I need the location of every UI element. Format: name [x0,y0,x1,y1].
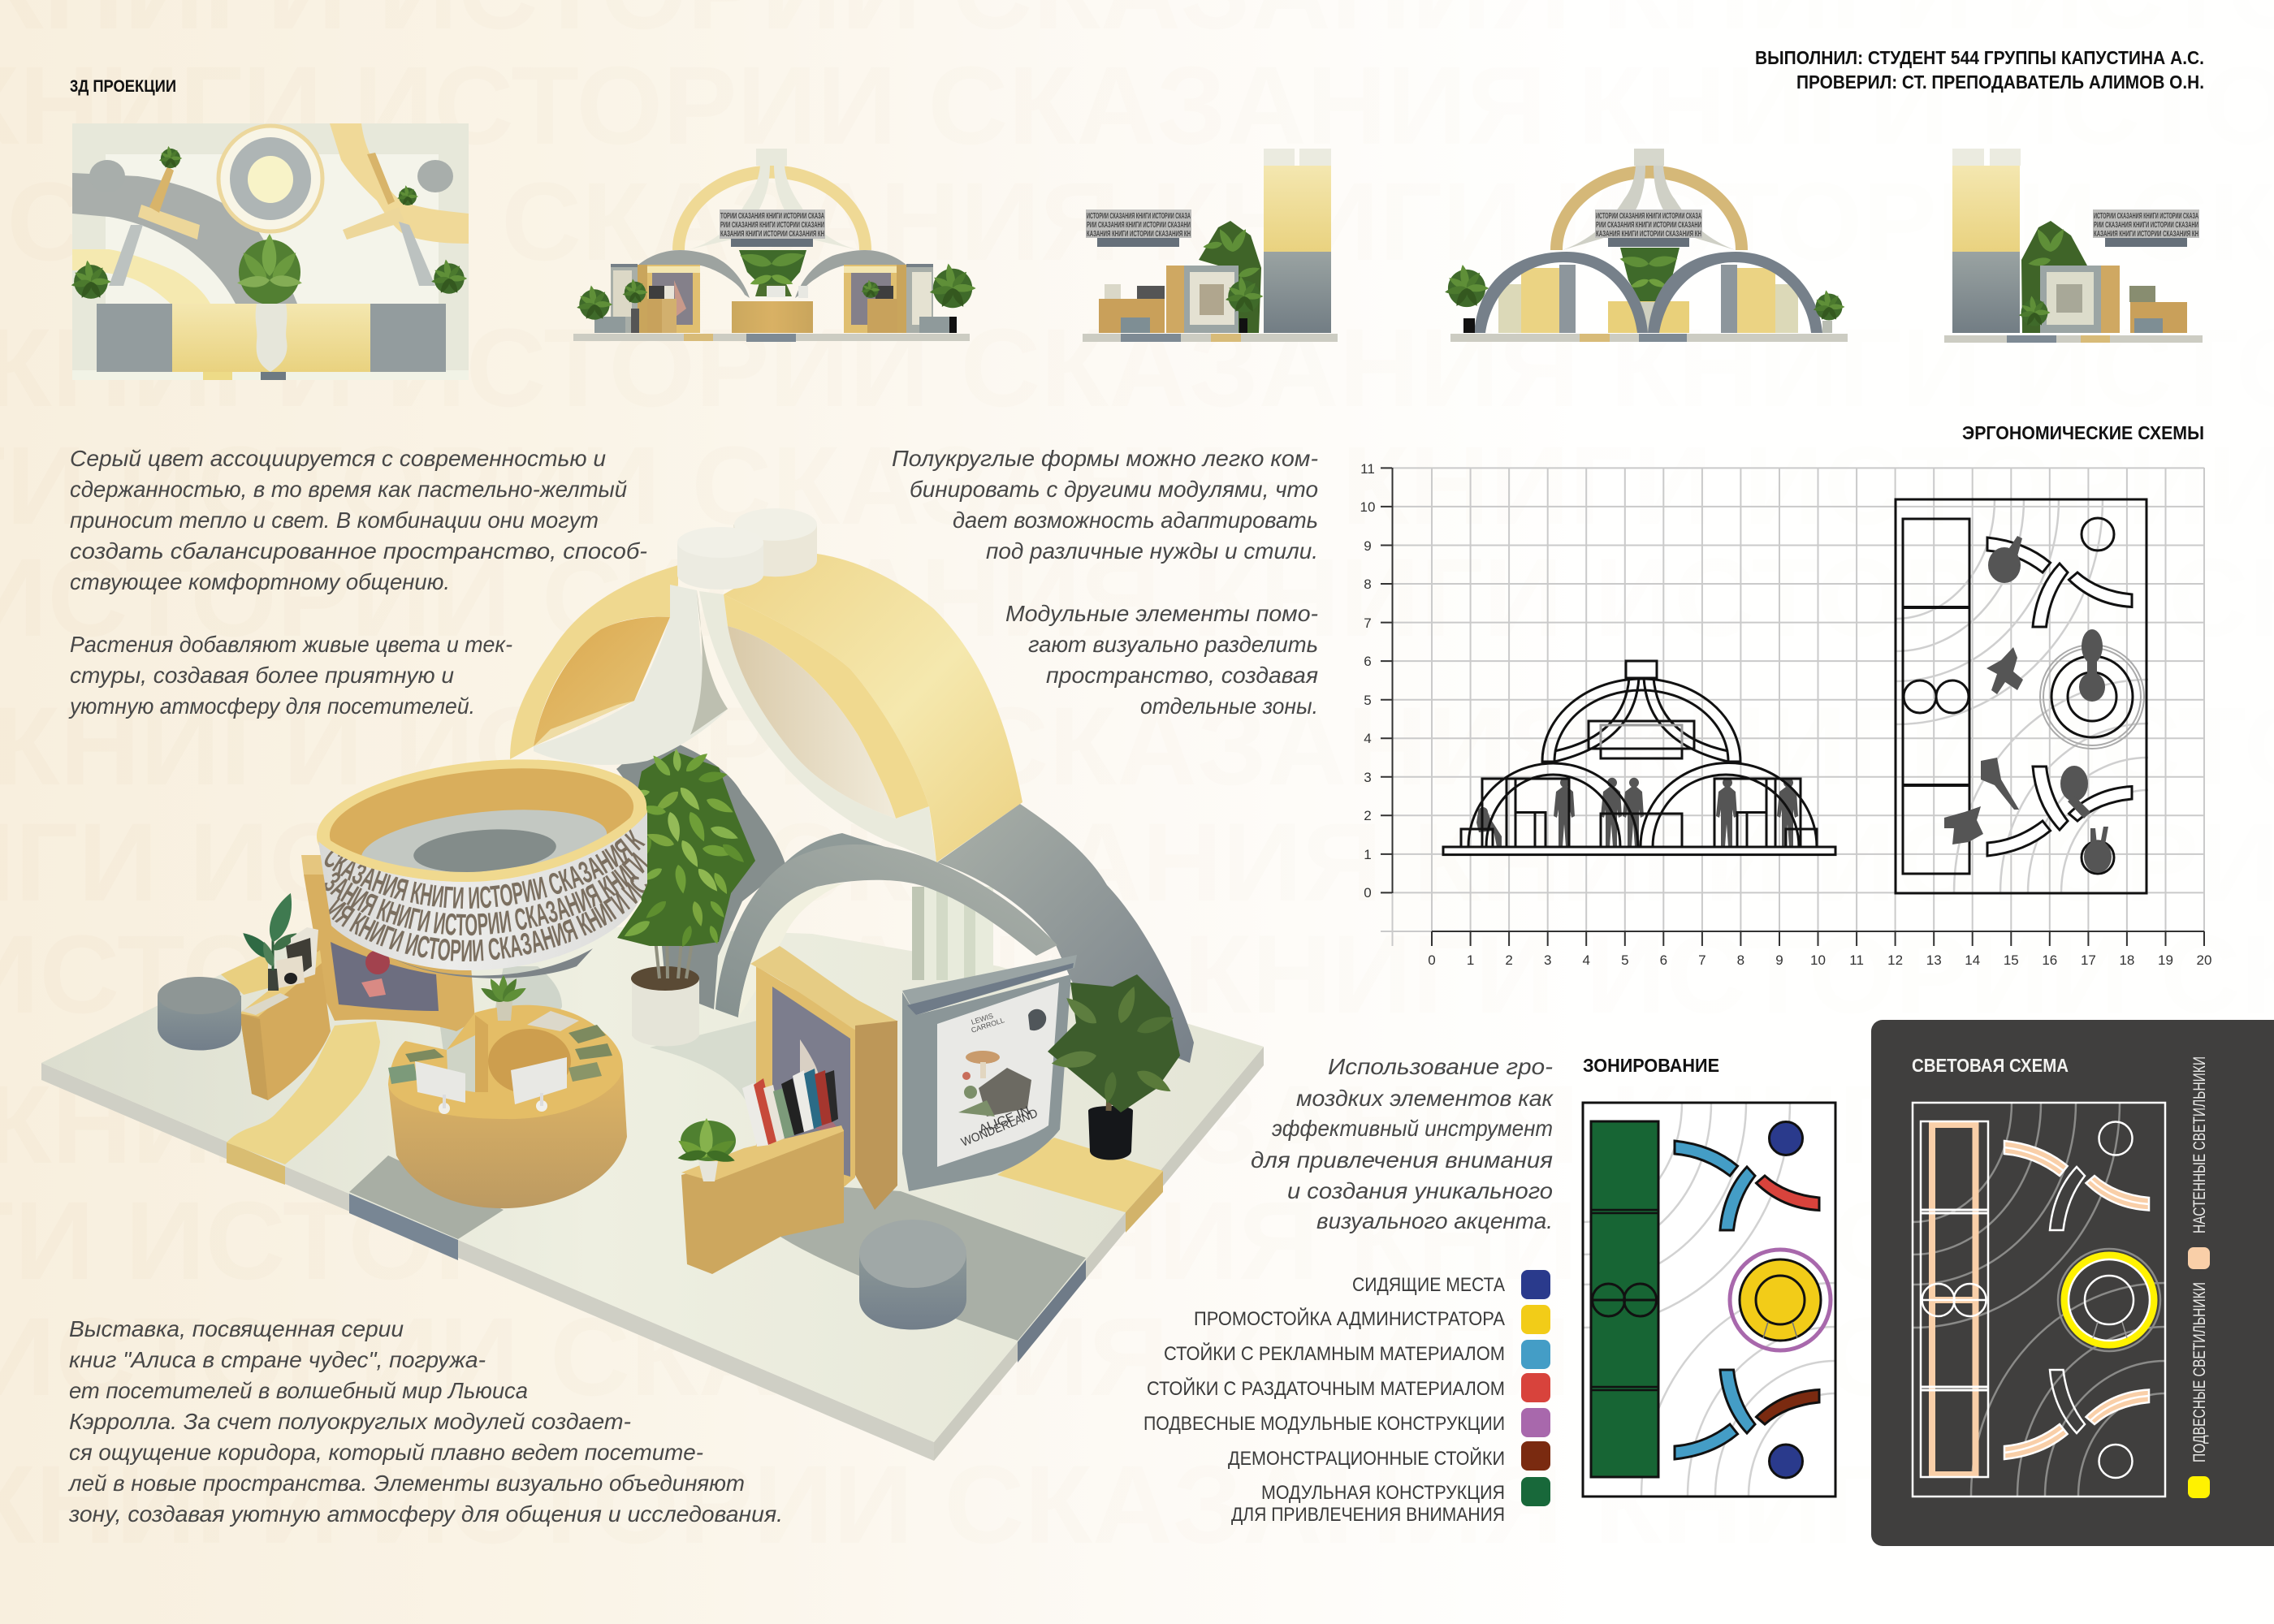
floor stripes [221,952,1163,1341]
left shelf with plant and books [239,890,331,1100]
y axis labels: 8 [1364,577,1372,592]
heading: zoning: ЗОНИРОВАНИЕ [1583,1055,1719,1076]
legend labels: ПРОМОСТОЙКА АДМИНИСТРАТОРА [1194,1307,1505,1330]
back elevation: ИСТОРИИ СКАЗАНИЯ КНИГИ ИСТОРИИ СКАЗА [1596,211,1701,221]
poster title [959,1012,1040,1150]
x axis labels: 3 [1544,952,1551,968]
x axis labels: 4 [1582,952,1590,968]
y axis labels: 7 [1364,615,1372,631]
monstera plant [1048,974,1180,1160]
poster title: CARROLL [971,1016,1005,1034]
text: large elements: и создания уникального [1287,1178,1553,1203]
top cylinders [677,508,817,590]
tan book stand [676,1069,844,1274]
left seat [158,977,241,1051]
front elevation [573,149,976,342]
legend labels: СТОЙКИ С РАЗДАТОЧНЫМ МАТЕРИАЛОМ [1147,1377,1505,1400]
potted plant [617,749,755,1047]
text: large elements [1251,1054,1554,1233]
x axis labels: 0 [1428,952,1436,968]
y axis labels: 4 [1364,731,1372,746]
text: large elements: Использование гро- [1328,1054,1553,1079]
right side elevation: КАЗАНИЯ КНИГИ ИСТОРИИ СКАЗАНИЯ КН [2094,229,2198,239]
text: exhibition description [67,1316,783,1527]
zoning plan [1583,1103,1835,1497]
hanging ring sign: СКАЗАНИЯ КНИГИ ИСТОРИИ СКАЗАНИЯ К [325,829,646,909]
text: exhibition description: лей в новые пространства. Элементы визуально объединяют [67,1471,745,1496]
text: exhibition description: ет посетителей в волшебный мир Льюиса [69,1378,528,1403]
back elevation: РИИ СКАЗАНИЯ КНИГИ ИСТОРИИ СКАЗАНИ [1596,220,1701,230]
text: semicircular forms: бинировать с другими модулями, что [910,477,1318,502]
grey poster wall [902,955,1077,1191]
left tan wall with poster [301,855,475,1031]
x axis labels: 14 [1965,952,1980,968]
text: colour concept: сдержанностью, в то время как пастельно-желтый [70,477,627,502]
y axis labels: 5 [1364,693,1372,708]
x axis labels: 9 [1775,952,1783,968]
x axis labels: 7 [1698,952,1706,968]
text: semicircular forms: под различные нужды и стили. [986,538,1318,564]
text: exhibition description: ся ощущение коридора, который плавно ведет посетите- [69,1440,703,1465]
y axis labels: 2 [1364,808,1372,823]
text: exhibition description: книг "Алиса в стране чудес", погружа- [69,1347,486,1372]
left side elevation: РИИ СКАЗАНИЯ КНИГИ ИСТОРИИ СКАЗАНИ [1087,220,1191,230]
x axis labels: 5 [1621,952,1629,968]
legend labels: СТОЙКИ С РЕКЛАМНЫМ МАТЕРИАЛОМ [1164,1342,1505,1365]
poster title: ALICE IN [977,1104,1032,1137]
text: semicircular forms [892,446,1318,564]
author credits [1755,47,2204,93]
text: plants: уютную атмосферу для посетителей. [68,693,475,719]
ergonomic chart [1360,461,2211,968]
zoning legend [1143,1270,1550,1526]
text: exhibition description: Кэрролла. За счет полуокруглых модулей создает- [69,1409,631,1434]
text: semicircular forms: Полукруглые формы можно легко ком- [892,446,1318,471]
3D exhibition render [41,508,1264,1461]
x axis labels: 12 [1887,952,1903,968]
elevation drawing [1443,661,1835,855]
text: colour concept: Серый цвет ассоциируется с современностью и [70,446,606,471]
y axis labels: 9 [1364,538,1372,554]
y axis labels: 10 [1360,499,1375,515]
text: plants: стуры, создавая более приятную и [70,663,454,688]
text: modular elements: отдельные зоны. [1140,693,1318,719]
back grey arch [616,740,786,1009]
legend swatches [1521,1270,1550,1506]
x axis labels: 1 [1467,952,1474,968]
wall lights label: НАСТЕННЫЕ СВЕТИЛЬНИКИ [2190,1056,2209,1233]
text: exhibition description: Выставка, посвященная серии [69,1316,404,1341]
poster title: LEWIS [971,1012,994,1026]
grid [1381,468,2204,946]
counter plant [478,975,528,1021]
y axis labels: 6 [1364,654,1372,669]
x axis labels: 13 [1926,952,1942,968]
poster illustration [958,1009,1046,1116]
poster title: WONDERLAND [959,1106,1040,1150]
text: modular elements [1005,601,1318,719]
front seat [859,1220,966,1330]
pendant lights swatch [2188,1476,2210,1498]
hanging ring sign: ИЯ КНИГИ ИСТОРИИ СКАЗАНИЯ КНИГИ ИС [329,876,646,961]
heading: lighting scheme: СВЕТОВАЯ СХЕМА [1912,1055,2069,1076]
right side elevation [1944,149,2203,343]
text: colour concept: создать сбалансированное пространство, способ- [70,538,647,564]
x axis labels: 19 [2158,952,2173,968]
legend labels: ПОДВЕСНЫЕ МОДУЛЬНЫЕ КОНСТРУКЦИИ [1143,1413,1505,1435]
y axis labels [1360,461,1375,901]
author credits: ПРОВЕРИЛ: СТ. ПРЕПОДАВАТЕЛЬ АЛИМОВ О.Н. [1796,71,2204,93]
front elevation: ТОРИИ СКАЗАНИЯ КНИГИ ИСТОРИИ СКАЗА [720,211,824,221]
heading: ergonomic schemes: ЭРГОНОМИЧЕСКИЕ СХЕМЫ [1962,422,2204,443]
legend labels: ДЛЯ ПРИВЛЕЧЕНИЯ ВНИМАНИЯ [1231,1504,1505,1526]
text: exhibition description: зону, создавая уютную атмосферу для общения и исследования. [68,1501,783,1527]
text: large elements: для привлечения внимания [1251,1147,1553,1173]
x axis labels: 17 [2081,952,2096,968]
back elevation [1444,149,1848,342]
x axis labels [1428,952,2211,968]
left yellow arch [510,565,728,765]
text: modular elements: пространство, создавая [1046,663,1318,688]
y axis labels: 1 [1364,847,1372,862]
text: colour concept: приносит тепло и свет. В комбинации они могут [70,508,599,533]
top view render [71,123,469,380]
visitors [1944,536,2112,873]
text: modular elements: Модульные элементы помо- [1005,601,1318,626]
legend labels: СИДЯЩИЕ МЕСТА [1352,1274,1505,1296]
front elevation: КАЗАНИЯ КНИГИ ИСТОРИИ СКАЗАНИЯ КН [720,229,824,239]
x axis labels: 2 [1505,952,1513,968]
text: large elements: моздких элементов как [1296,1086,1554,1111]
legend labels: МОДУЛЬНАЯ КОНСТРУКЦИЯ [1261,1482,1505,1504]
platform top [41,918,1264,1442]
x axis labels: 20 [2197,952,2211,968]
x axis labels: 16 [2042,952,2057,968]
lighting plan [1913,1103,2165,1497]
right grey arch [937,804,1194,1063]
platform sides [41,1047,1264,1461]
x axis labels: 18 [2119,952,2134,968]
text: plants [68,632,512,719]
panel: lighting scheme [1871,1020,2274,1546]
text: colour concept [70,446,647,594]
hanging ring sign [317,759,647,978]
left side elevation [1083,149,1338,342]
hanging ring sign: ЗАНИЯ КНИГИ ИСТОРИИ СКАЗАНИЯ КНИГИ [325,853,647,935]
wall lights swatch [2188,1247,2210,1269]
pendant lights label: ПОДВЕСНЫЕ СВЕТИЛЬНИКИ [2190,1282,2209,1462]
author credits: ВЫПОЛНИЛ: СТУДЕНТ 544 ГРУППЫ КАПУСТИНА А.С. [1755,47,2204,68]
text: semicircular forms: дает возможность адаптировать [953,508,1318,533]
front grey arch [715,833,1057,1017]
y axis labels: 0 [1364,885,1372,901]
x axis labels: 11 [1849,952,1864,968]
front elevation: РИИ СКАЗАНИЯ КНИГИ ИСТОРИИ СКАЗАНИ [720,220,824,230]
heading: 3D projections: 3Д ПРОЕКЦИИ [70,77,176,96]
admin counter [388,975,627,1208]
back elevation: КАЗАНИЯ КНИГИ ИСТОРИИ СКАЗАНИЯ КН [1596,229,1701,239]
axes [1381,468,2204,946]
text: colour concept: ствующее комфортному общению. [70,569,450,594]
plan drawing [1896,499,2148,893]
x axis labels: 10 [1810,952,1826,968]
text: modular elements: гают визуально разделить [1028,632,1318,657]
x axis labels: 6 [1660,952,1667,968]
text: large elements: эффективный инструмент [1272,1116,1553,1141]
y axis labels: 3 [1364,770,1372,785]
x axis labels: 8 [1737,952,1744,968]
y axis labels: 11 [1360,461,1375,477]
left side elevation: КАЗАНИЯ КНИГИ ИСТОРИИ СКАЗАНИЯ КН [1087,229,1191,239]
text: plants: Растения добавляют живые цвета и тек- [70,632,512,657]
text: large elements: визуального акцента. [1316,1208,1553,1233]
books [742,1069,838,1147]
striped columns [912,887,993,980]
right yellow arch [699,554,1022,862]
legend labels: ДЕМОНСТРАЦИОННЫЕ СТОЙКИ [1228,1447,1505,1470]
left side elevation: ИСТОРИИ СКАЗАНИЯ КНИГИ ИСТОРИИ СКАЗА [1087,211,1191,221]
small plant [676,1118,737,1181]
x axis labels: 15 [2004,952,2019,968]
yellow poster wall [750,946,898,1210]
legend labels [1143,1274,1505,1526]
